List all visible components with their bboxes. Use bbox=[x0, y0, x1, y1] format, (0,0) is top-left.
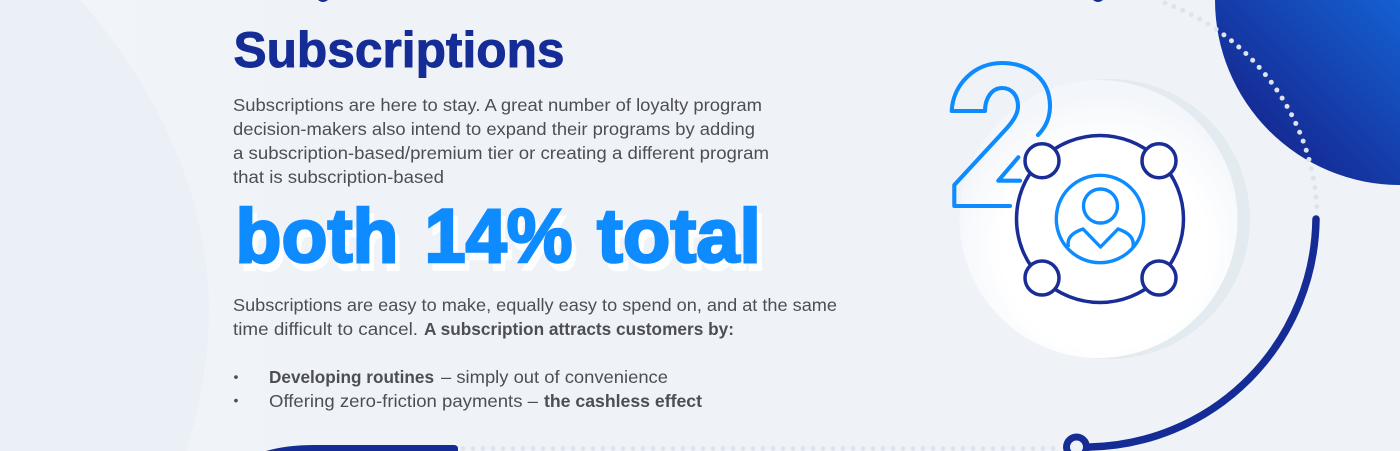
big statistic: both bbox=[240, 202, 403, 286]
timeline arc bbox=[1090, 219, 1316, 447]
bullet list: – simply out of convenience bbox=[441, 367, 668, 387]
intro paragraph bbox=[233, 95, 769, 187]
intro paragraph: that is subscription-based bbox=[233, 167, 444, 187]
bottom bar bbox=[266, 445, 458, 451]
bullet list: • bbox=[234, 368, 238, 384]
second paragraph: Subscriptions are easy to make, equally easy to spend on, and at the same bbox=[233, 295, 837, 315]
big statistic: both bbox=[236, 194, 398, 279]
top-right blue circle bbox=[1215, 0, 1400, 185]
big statistic: 14% bbox=[424, 194, 572, 279]
icon disc bbox=[960, 80, 1238, 358]
big statistic: total bbox=[602, 202, 766, 286]
timeline node bbox=[1063, 434, 1090, 451]
icon disc shadow bbox=[970, 79, 1250, 359]
intro paragraph: decision-makers also intend to expand their programs by adding bbox=[233, 119, 755, 139]
title: Subscriptions bbox=[234, 22, 564, 78]
bullet list: • bbox=[234, 392, 238, 408]
big statistic bbox=[236, 194, 766, 286]
big statistic: total bbox=[597, 194, 761, 279]
intro paragraph: Subscriptions are here to stay. A great number of loyalty program bbox=[233, 95, 762, 115]
bullet list bbox=[234, 367, 702, 411]
icon: person bbox=[1056, 175, 1144, 263]
background curved shape bbox=[0, 0, 209, 451]
bullet list: Offering zero-friction payments – bbox=[269, 391, 538, 411]
second paragraph bbox=[233, 295, 837, 339]
dotted bottom line bbox=[463, 446, 1060, 451]
background band bbox=[0, 0, 300, 451]
second paragraph: time difficult to cancel. bbox=[233, 319, 418, 339]
second paragraph: A subscription attracts customers by: bbox=[424, 319, 734, 339]
outer ring bbox=[1016, 136, 1184, 302]
bullet list: Developing routines bbox=[269, 367, 434, 387]
big statistic: 14% bbox=[429, 202, 577, 286]
icon: customer network bbox=[1016, 136, 1184, 302]
intro paragraph: a subscription-based/premium tier or creating a different program bbox=[233, 143, 769, 163]
bullet list: the cashless effect bbox=[544, 391, 702, 411]
previous section marks bbox=[318, 0, 1103, 2]
number 2 outline bbox=[952, 63, 1050, 206]
dotted timeline arc bbox=[1165, 3, 1317, 210]
connection nodes bbox=[1025, 144, 1176, 295]
